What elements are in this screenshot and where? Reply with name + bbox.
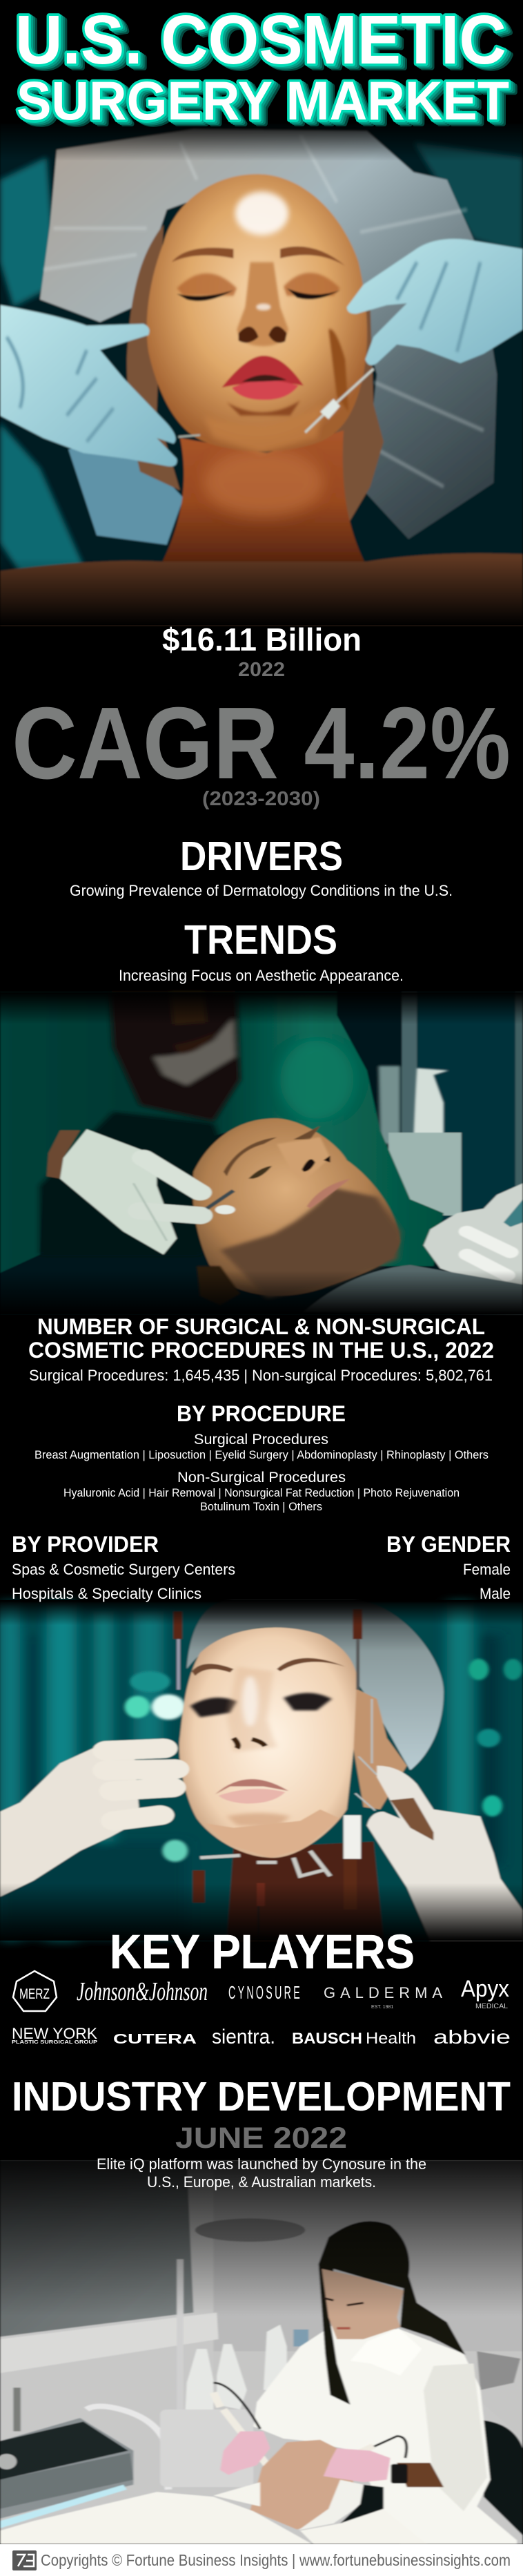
- footer: [0, 2544, 523, 2576]
- statistics heading: [28, 1314, 494, 1384]
- neck: [227, 1842, 384, 1941]
- image: doctor treating male patient: [0, 992, 523, 1314]
- gap in right hand: [391, 1798, 433, 1840]
- patient sheet: [304, 1265, 523, 1314]
- logo: Bausch Health: BAUSCH: [292, 2030, 362, 2047]
- cosmetic bottles: [185, 2325, 308, 2414]
- logo: Apyx Medical: Apyx: [461, 1976, 509, 2002]
- head wrap: [187, 1600, 444, 1770]
- logo: Bausch Health: Health: [366, 2029, 416, 2047]
- watch: [391, 2464, 408, 2483]
- patient head: [250, 2440, 353, 2530]
- by procedure: [34, 1401, 489, 1513]
- industry development: U.S., Europe, & Australian markets.: [147, 2173, 376, 2191]
- logo: Bausch Health: [292, 2029, 416, 2047]
- industry development: Elite iQ platform was launched by Cynosure in the: [97, 2155, 426, 2173]
- title: SURGERY MARKET: [17, 70, 509, 131]
- trends: TRENDS: [184, 917, 337, 963]
- patient headband: [299, 2480, 364, 2530]
- right glove: [367, 1766, 523, 1941]
- drivers: DRIVERS: [180, 834, 343, 879]
- patient head: [193, 1118, 400, 1305]
- by provider: [12, 1532, 235, 1602]
- clinician chair: [484, 2421, 523, 2535]
- instrument: [207, 1191, 233, 1209]
- clinician face: [322, 2269, 404, 2339]
- image: woman with facial implants: [0, 1600, 523, 1941]
- jaw implants: [173, 1609, 377, 1941]
- by gender: BY GENDER: [386, 1532, 511, 1557]
- eyes and brows: [172, 247, 345, 301]
- statistics heading: Surgical Procedures: 1,645,435 | Non-surgical Procedures: 5,802,761: [29, 1367, 493, 1384]
- trends: Increasing Focus on Aesthetic Appearance.: [119, 967, 404, 984]
- hair: [127, 224, 384, 532]
- lips: [221, 356, 304, 400]
- logo: Apyx Medical: MEDICAL: [475, 2003, 508, 2010]
- by gender: Male: [480, 1585, 511, 1602]
- key players heading: KEY PLAYERS: [110, 1925, 415, 1979]
- statistics heading: COSMETIC PROCEDURES IN THE U.S., 2022: [28, 1338, 494, 1363]
- by procedure: BY PROCEDURE: [177, 1401, 346, 1426]
- logo: AbbVie: abbvie: [433, 2026, 511, 2048]
- left glove: [0, 305, 177, 466]
- side of head: [353, 1687, 407, 1809]
- cap folds: [43, 135, 484, 487]
- logo: Galderma: EST. 1981: [371, 2005, 393, 2010]
- doctor scrubs: [0, 992, 444, 1273]
- collar: [351, 2328, 422, 2376]
- facial features: [190, 1658, 345, 1828]
- cables: [213, 2383, 406, 2458]
- market size: 2022: [238, 659, 285, 681]
- left glove: [0, 1745, 175, 1897]
- drivers: [70, 834, 453, 899]
- by provider: Spas & Cosmetic Surgery Centers: [12, 1561, 235, 1578]
- clinician hair: [319, 2221, 465, 2405]
- by procedure: Botulinum Toxin | Others: [200, 1500, 322, 1513]
- syringe: [179, 369, 373, 437]
- logo: Galderma: [324, 1984, 442, 2010]
- logo: New York Plastic Surgical Group: PLASTIC SURGICAL GROUP: [12, 2039, 97, 2045]
- image: woman receiving facial procedure: [0, 119, 523, 625]
- by procedure: Hyaluronic Acid | Hair Removal | Nonsurgical Fat Reduction | Photo Rejuvenation: [63, 1486, 460, 1499]
- surgical cap: [40, 129, 497, 539]
- icon: Fortune Business Insights logo: [12, 2550, 37, 2570]
- by procedure: Breast Augmentation | Liposuction | Eyelid Surgery | Abdominoplasty | Rhinoplasty | Others: [34, 1448, 489, 1461]
- by procedure: Non-Surgical Procedures: [177, 1470, 346, 1486]
- industry development: INDUSTRY DEVELOPMENT: [12, 2074, 511, 2120]
- bokeh lights: [125, 1659, 522, 1862]
- cap lower left: [68, 438, 184, 545]
- by procedure: Surgical Procedures: [194, 1432, 328, 1448]
- industry development: [12, 2074, 511, 2191]
- trolley rail: [87, 2406, 168, 2490]
- device wand: [213, 2392, 373, 2485]
- skin machine: [0, 2387, 133, 2528]
- clinic room: [0, 2161, 523, 2544]
- face: [179, 1628, 357, 1858]
- by gender: Female: [463, 1561, 511, 1578]
- market size: $16.11 Billion: [162, 622, 362, 657]
- trends: [119, 917, 404, 984]
- patient blanket: [0, 2482, 427, 2544]
- face: [147, 174, 367, 452]
- blurred background: [0, 1602, 500, 1941]
- title: [15, 1, 509, 131]
- equipment and bottles: [379, 992, 523, 1215]
- doctor face: [110, 992, 240, 1121]
- gloved hands: [220, 2431, 391, 2482]
- nose: [237, 262, 288, 346]
- shoulders: [0, 553, 523, 625]
- CAGR: (2023-2030): [202, 788, 320, 810]
- logo: Johnson & Johnson: Johnson&Johnson: [77, 1977, 208, 2006]
- clinician coat: [253, 2325, 517, 2544]
- by provider: Hospitals & Specialty Clinics: [12, 1585, 201, 1602]
- neck: [157, 430, 371, 573]
- logo: Galderma: GALDERMA: [324, 1984, 442, 2001]
- by provider: BY PROVIDER: [12, 1532, 159, 1557]
- doctor left glove: [47, 1129, 200, 1255]
- logo: New York Plastic Surgical Group: NEW YORK: [12, 2025, 97, 2042]
- drivers: Growing Prevalence of Dermatology Conditions in the U.S.: [70, 882, 453, 899]
- logo: Cutera: CUTERA: [113, 2032, 197, 2047]
- market size: [162, 622, 362, 681]
- right glove: [424, 1183, 523, 1287]
- forearm: [397, 2463, 444, 2487]
- image: clinician using facial device: [0, 2161, 523, 2544]
- logo: Cynosure: CYNOSURE: [228, 1982, 302, 2003]
- statistics heading: NUMBER OF SURGICAL & NON-SURGICAL: [37, 1314, 485, 1339]
- by gender: [386, 1532, 511, 1602]
- logo: Merz: MERZ: [19, 1986, 50, 2002]
- title: U.S. COSMETIC: [15, 1, 506, 79]
- logo: Merz: [13, 1971, 57, 2011]
- logo: Sientra: sientra.: [212, 2026, 275, 2048]
- right glove: [347, 239, 523, 365]
- industry development: JUNE 2022: [175, 2122, 347, 2155]
